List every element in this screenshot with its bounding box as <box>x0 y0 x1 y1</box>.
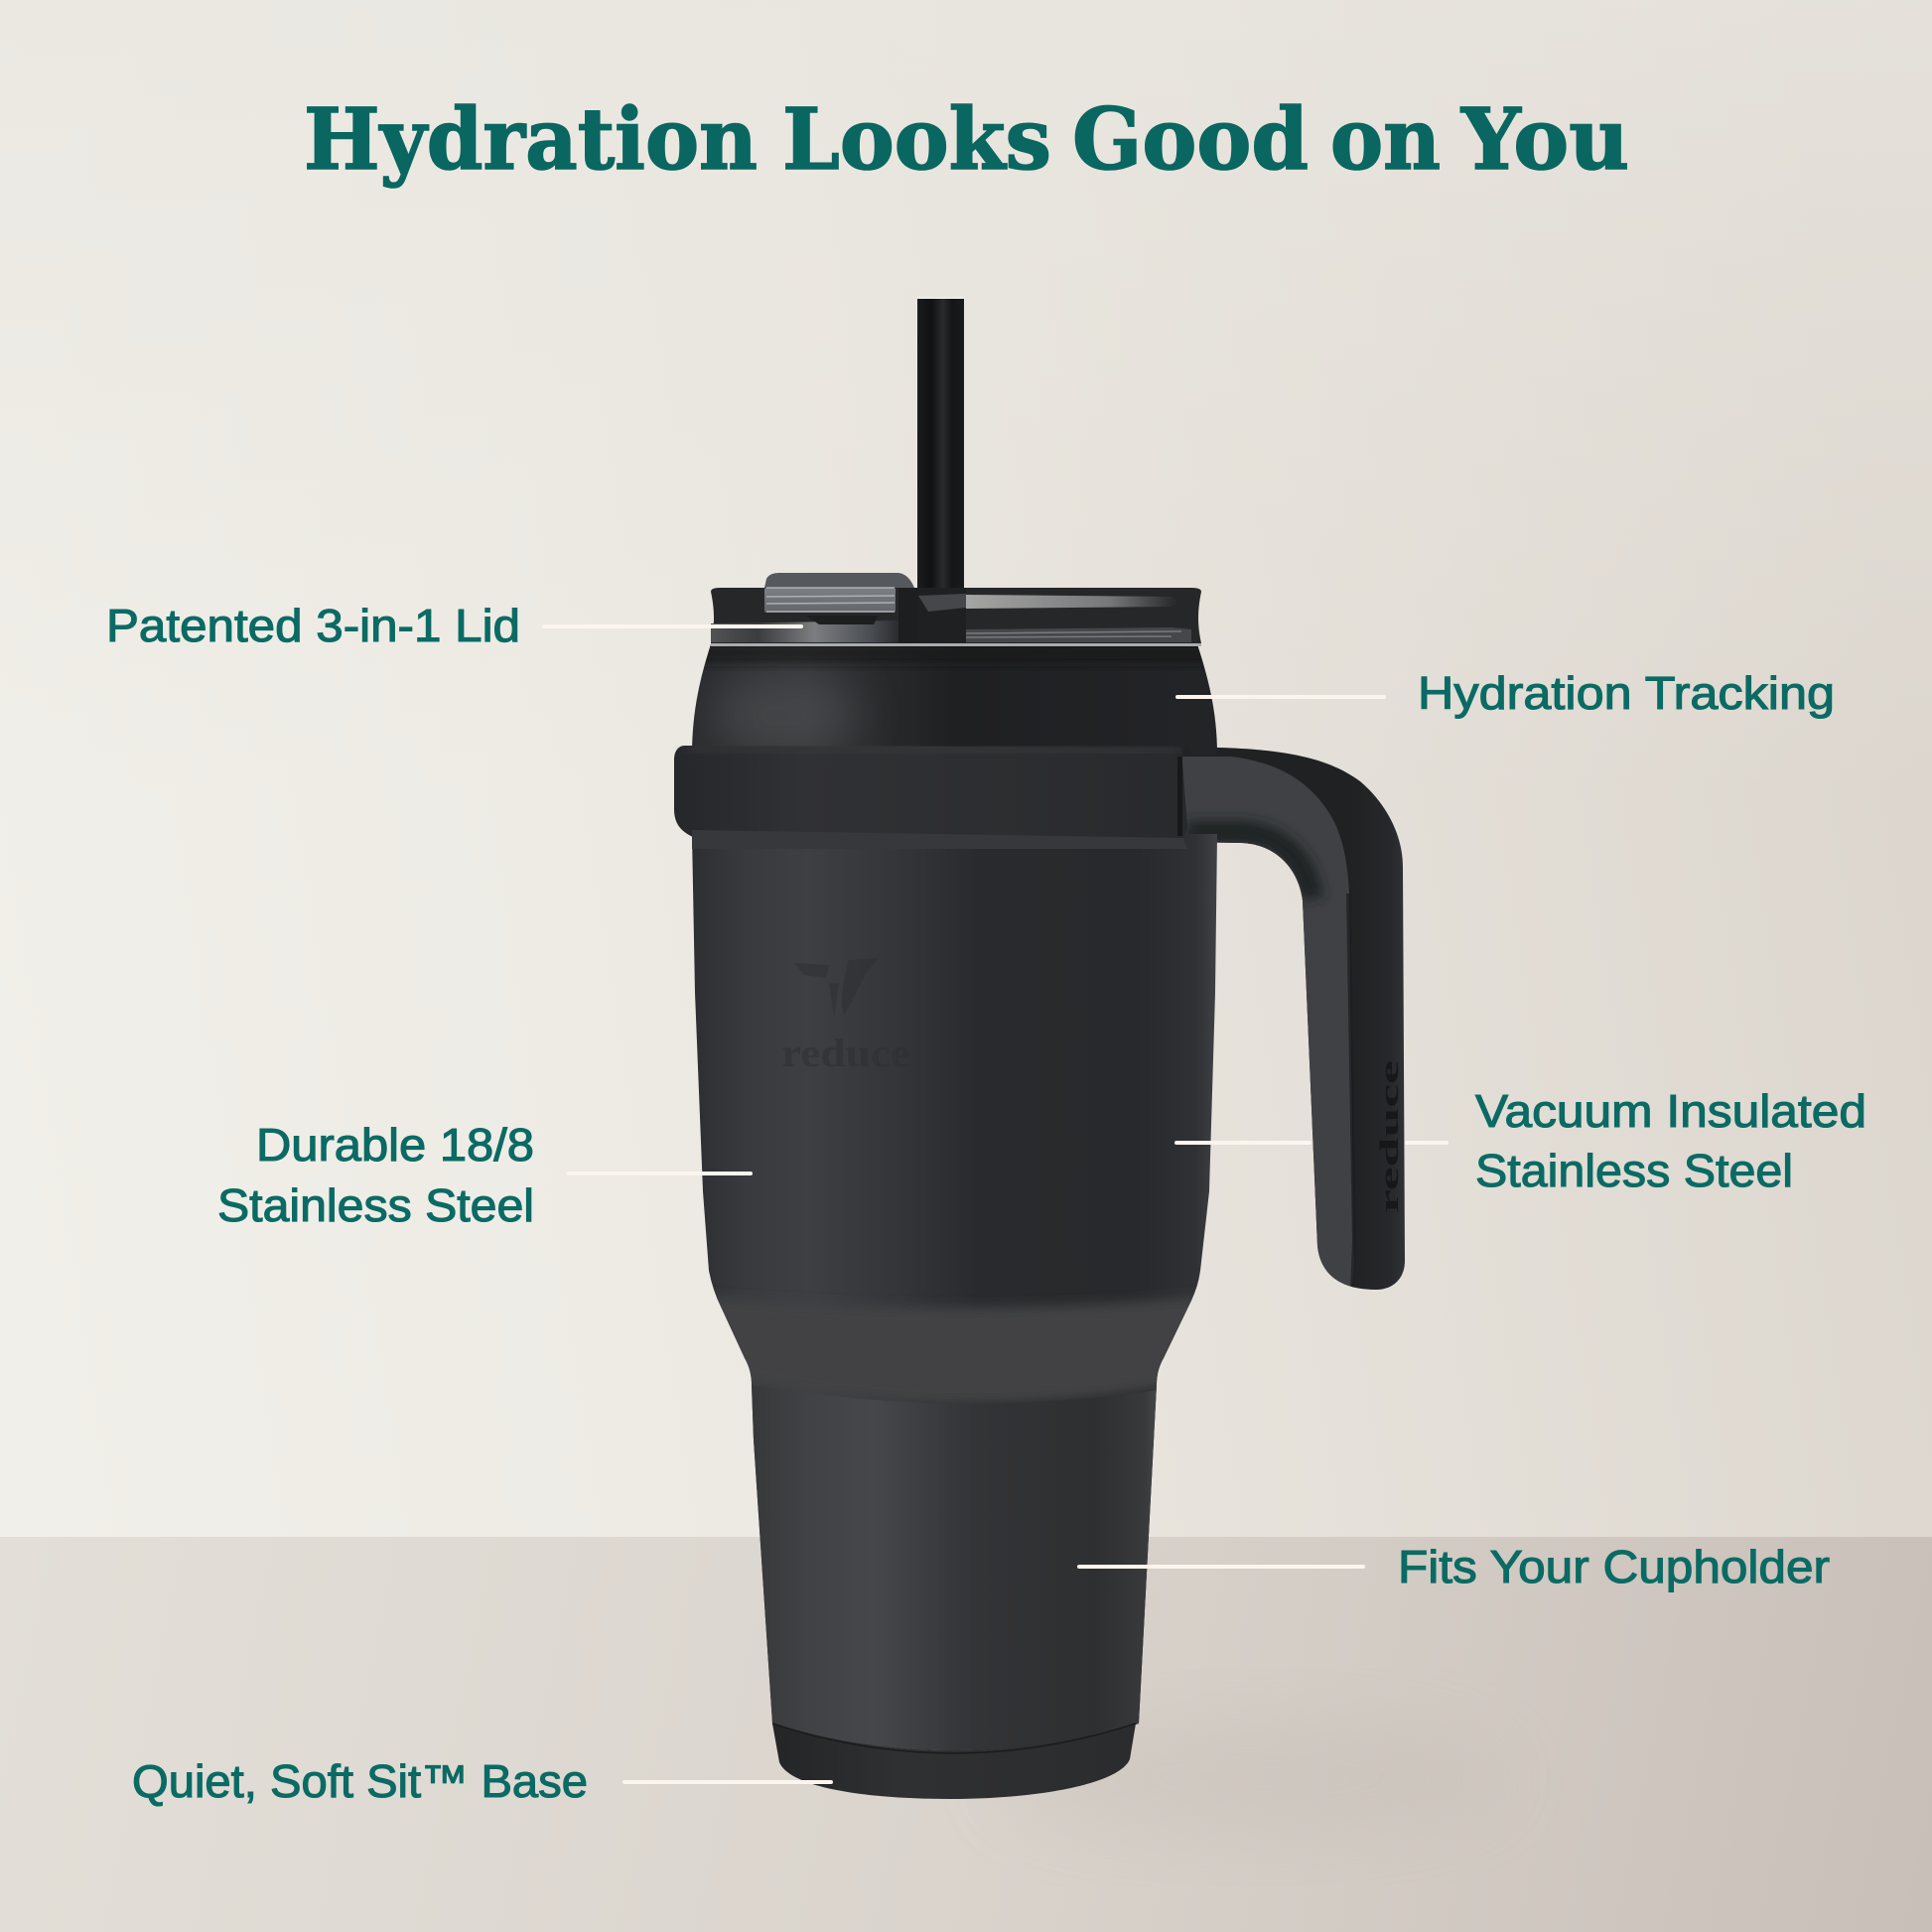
vacuum label <box>1475 1085 1866 1196</box>
title: You <box>1460 90 1629 190</box>
lid label: Patented 3-in-1 Lid <box>106 600 520 651</box>
band <box>674 746 1217 849</box>
logo leaf <box>794 958 879 1018</box>
handle embossed wordmark: reduce <box>1375 1060 1404 1213</box>
base seam <box>772 1724 1136 1753</box>
embossed logo on body <box>781 958 910 1075</box>
lid rim line <box>711 643 1201 646</box>
title: Hydration <box>304 90 758 190</box>
base leader line <box>622 1780 833 1784</box>
base <box>772 1724 1136 1799</box>
shoulder highlight <box>704 644 1204 746</box>
callout: cupholder <box>1077 1541 1830 1592</box>
vacuum label: Stainless Steel <box>1475 1145 1793 1196</box>
title: Good <box>1072 90 1309 190</box>
lid slot <box>953 627 1191 642</box>
tracking leader line <box>1175 695 1386 699</box>
logo wordmark: reduce <box>781 1031 910 1075</box>
tumbler illustration <box>674 297 1405 1799</box>
callout: lid <box>106 600 803 651</box>
straw seen through lid <box>898 588 918 643</box>
callout: hydration tracking <box>1175 667 1835 719</box>
body <box>685 834 1221 1787</box>
background floor <box>0 1537 1932 1932</box>
callout: base <box>132 1755 833 1807</box>
straw <box>917 297 964 600</box>
handle <box>1177 748 1405 1291</box>
callout: vacuum insulated <box>1174 1085 1866 1196</box>
vacuum label: Vacuum Insulated <box>1475 1085 1866 1137</box>
durable label <box>217 1119 534 1231</box>
shoulder <box>692 644 1217 755</box>
cupholder leader line <box>1077 1565 1365 1569</box>
background wall <box>0 0 1932 1537</box>
durable label: Durable 18/8 <box>256 1119 534 1171</box>
callout: durable steel <box>217 1119 753 1231</box>
lid leader line <box>542 624 803 628</box>
title: Looks <box>782 90 1051 190</box>
title: on <box>1330 90 1441 190</box>
lid <box>711 573 1201 646</box>
lower body section <box>752 1386 1157 1750</box>
vacuum leader line, outer segment <box>1405 1141 1449 1145</box>
durable label: Stainless Steel <box>217 1179 534 1231</box>
vacuum leader line, body segment <box>1174 1141 1311 1145</box>
flip cap <box>764 573 914 624</box>
title <box>304 90 1629 190</box>
lid gloss left <box>711 621 898 642</box>
lid highlight right <box>966 595 1176 609</box>
taper band <box>685 1295 1221 1404</box>
cupholder label: Fits Your Cupholder <box>1398 1541 1830 1592</box>
floor shadow <box>993 1723 1509 1832</box>
durable leader line <box>567 1172 753 1175</box>
base label: Quiet, Soft Sit™ Base <box>132 1755 588 1807</box>
tracking label: Hydration Tracking <box>1418 667 1835 719</box>
